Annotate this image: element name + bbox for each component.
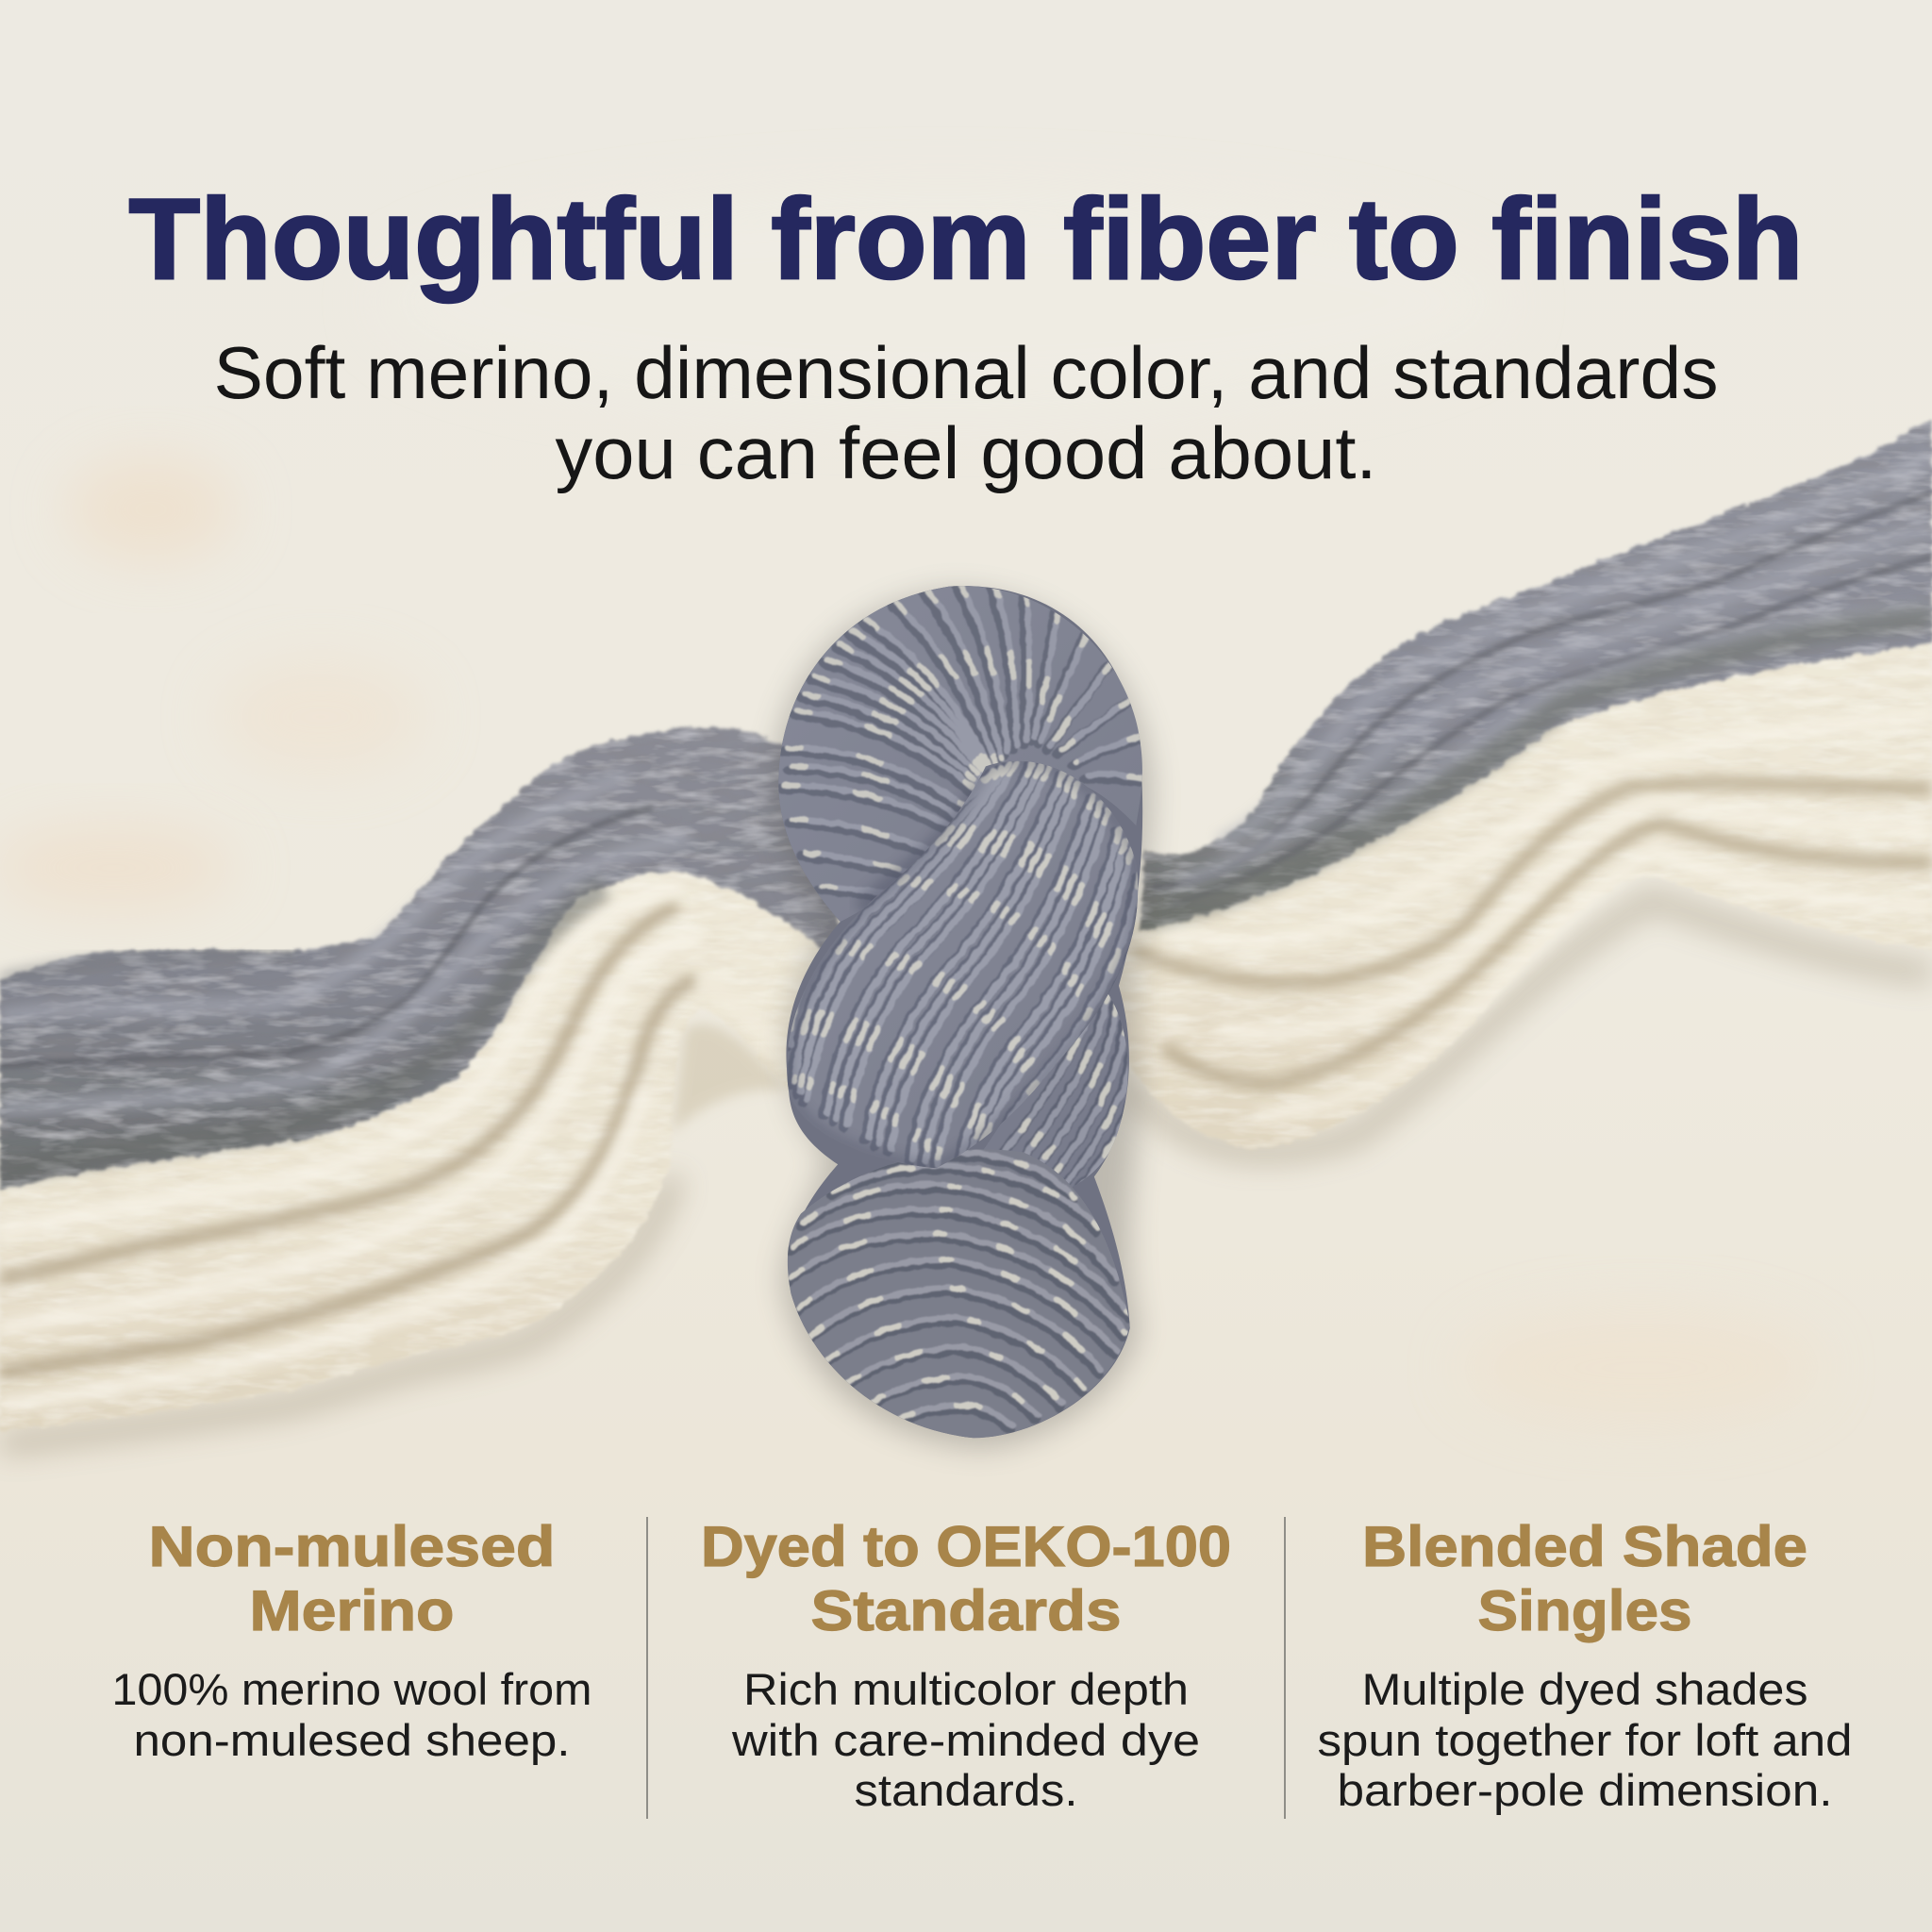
roving: cast shadow	[0, 899, 1932, 1444]
skein: middle lobe	[787, 760, 1138, 1168]
yarn skein	[778, 586, 1143, 1438]
feature column: Non-mulesed Merino	[111, 1515, 592, 1765]
heading: Non-mulesed Merino	[149, 1515, 555, 1642]
subtitle: Soft merino, dimensional color, and standards	[213, 331, 1719, 414]
skein: bottom lobe	[787, 1149, 1130, 1438]
skein: base silhouette	[778, 586, 1142, 1438]
roving: right gray band	[1140, 419, 1932, 930]
illustration: wool roving and yarn skein	[0, 419, 1932, 1454]
body text: merino: non-mulesed sheep.	[134, 1715, 570, 1765]
heading: Blended Shade Singles	[1362, 1515, 1807, 1642]
title: Thoughtful from fiber to finish	[128, 175, 1804, 303]
body text: blended shades: spun together for loft and	[1317, 1715, 1853, 1765]
body text: dye standards: Rich multicolor depth	[743, 1664, 1189, 1714]
body text: merino: 100% merino wool from	[111, 1664, 592, 1714]
heading: Dyed to OEKO-100 Standards: Dyed to OEKO-100	[701, 1515, 1231, 1578]
feature column: Blended Shade Singles	[1317, 1515, 1853, 1815]
subtitle: you can feel good about.	[555, 411, 1377, 494]
roving: right cream band	[1109, 641, 1932, 1149]
body text: dye standards: standards.	[855, 1765, 1077, 1815]
heading: Blended Shade Singles: Blended Shade	[1362, 1515, 1807, 1578]
skein shadow	[773, 591, 1152, 1448]
body text: dye standards	[731, 1664, 1200, 1815]
heading: Dyed to OEKO-100 Standards	[701, 1515, 1231, 1642]
roving: left gray band	[0, 727, 838, 1189]
skein: top lobe	[779, 586, 1142, 921]
feature column: Dyed to OEKO-100 Standards	[701, 1515, 1231, 1815]
heading: Non-mulesed Merino: Non-mulesed	[149, 1515, 555, 1578]
divider left	[646, 1517, 648, 1819]
body text: dye standards: with care-minded dye	[731, 1715, 1200, 1765]
body text: blended shades	[1317, 1664, 1853, 1815]
heading: Dyed to OEKO-100 Standards: Standards	[811, 1579, 1121, 1642]
heading: Non-mulesed Merino: Merino	[249, 1579, 455, 1642]
roving: left cream band	[0, 857, 862, 1430]
body text: merino	[111, 1664, 592, 1765]
skein: right fold	[985, 994, 1128, 1187]
heading: Blended Shade Singles: Singles	[1477, 1579, 1692, 1642]
subtitle	[213, 331, 1719, 494]
body text: blended shades: Multiple dyed shades	[1362, 1664, 1807, 1714]
body text: blended shades: barber-pole dimension.	[1338, 1765, 1832, 1815]
divider right	[1284, 1517, 1286, 1819]
